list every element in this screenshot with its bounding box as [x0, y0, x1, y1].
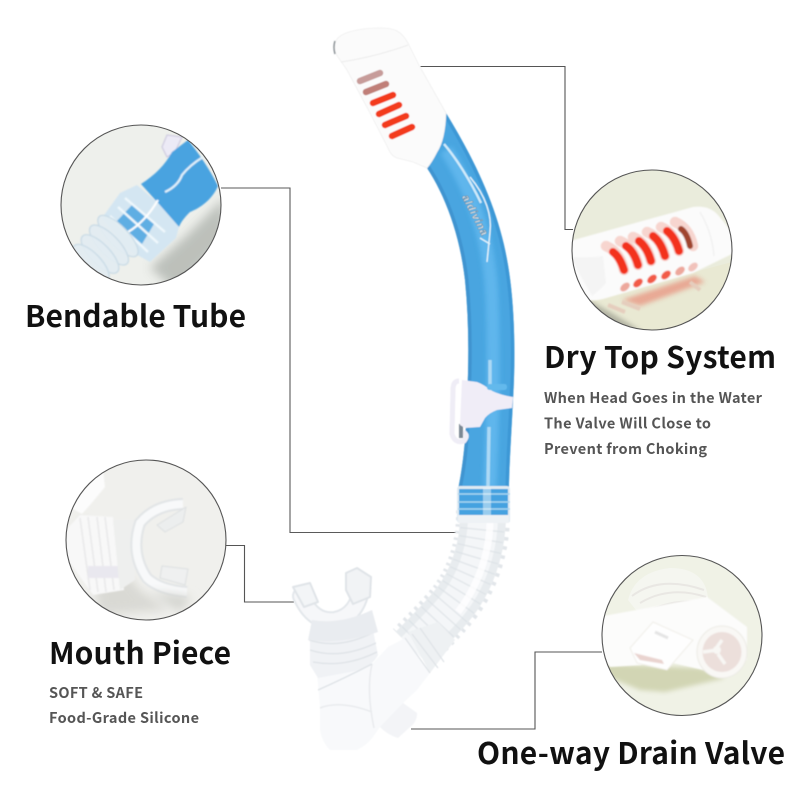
- neck: [117, 550, 134, 588]
- tube brand logo: aldivina: [459, 193, 490, 238]
- clip fragment: [162, 135, 182, 157]
- mouth piece: [293, 568, 378, 690]
- text block: dry top description: Prevent from Choking: [544, 438, 707, 459]
- collar: [457, 486, 510, 523]
- tube edge shading: [427, 168, 468, 490]
- tube swoosh: [470, 177, 490, 262]
- text block: mouth piece description: SOFT & SAFE: [49, 682, 143, 703]
- upper bite tab: [157, 507, 186, 532]
- white body: [602, 597, 747, 670]
- shadow stripes: [608, 282, 700, 312]
- heading: Dry Top System: Dry Top System: [544, 333, 776, 377]
- panel: drain valve detail: [598, 556, 762, 716]
- panel: dry top detail: [570, 170, 734, 335]
- text block: dry top description: [544, 387, 763, 459]
- product: snorkel: [293, 28, 514, 750]
- lower bite tab: [160, 566, 188, 585]
- shadow: [94, 581, 164, 616]
- heading: One-way Drain Valve: One-way Drain Valve: [477, 729, 785, 773]
- dark shadow edge: [590, 300, 639, 328]
- bottom surface: [596, 263, 730, 330]
- shadow: [606, 664, 725, 692]
- valve spokes: [703, 640, 725, 664]
- tube center band: [446, 150, 493, 488]
- large slots: [606, 222, 693, 270]
- small lower slots: [619, 261, 699, 293]
- blue pipe: [141, 140, 218, 227]
- vent slots: [360, 73, 412, 136]
- heading: Mouth Piece: Mouth Piece: [49, 629, 231, 673]
- connector: drain valve callout: [411, 652, 602, 729]
- connector: mouth piece callout: [226, 546, 294, 602]
- bellows: [73, 214, 138, 278]
- circle outline: [572, 170, 732, 330]
- circle outline: [61, 125, 221, 285]
- connector: dry top callout: [420, 66, 573, 230]
- valve cylinder: [697, 626, 747, 678]
- circle outline: [66, 460, 226, 620]
- circle outline: [602, 556, 762, 716]
- transparent collar: [102, 185, 179, 262]
- text block: dry top description: The Valve Will Close to: [544, 412, 711, 434]
- text block: mouth piece description: Food-Grade Silicone: [49, 707, 199, 728]
- dry top cap: [334, 28, 446, 168]
- connector: bendable tube callout: [221, 188, 456, 532]
- tube clip: [452, 380, 513, 442]
- lower body: [317, 622, 455, 750]
- text block: dry top description: When Head Goes in the Water: [544, 387, 763, 408]
- soft shadow: [158, 590, 190, 612]
- blue tube: [427, 113, 514, 490]
- panel: mouth piece detail: [66, 460, 226, 620]
- corrugated hose: [412, 510, 490, 648]
- translucent hose rings: [628, 568, 708, 610]
- heading: Bendable Tube: Bendable Tube: [25, 292, 246, 336]
- panel: bendable tube detail: [61, 125, 226, 292]
- drain spout: [630, 622, 693, 670]
- red reflection: [622, 276, 705, 306]
- text block: mouth piece description: [49, 682, 199, 728]
- tube highlight: [444, 144, 481, 203]
- U-shaped bite: [136, 504, 187, 592]
- cap body: [570, 207, 734, 300]
- shadow: [148, 198, 220, 282]
- threaded section: [66, 515, 124, 595]
